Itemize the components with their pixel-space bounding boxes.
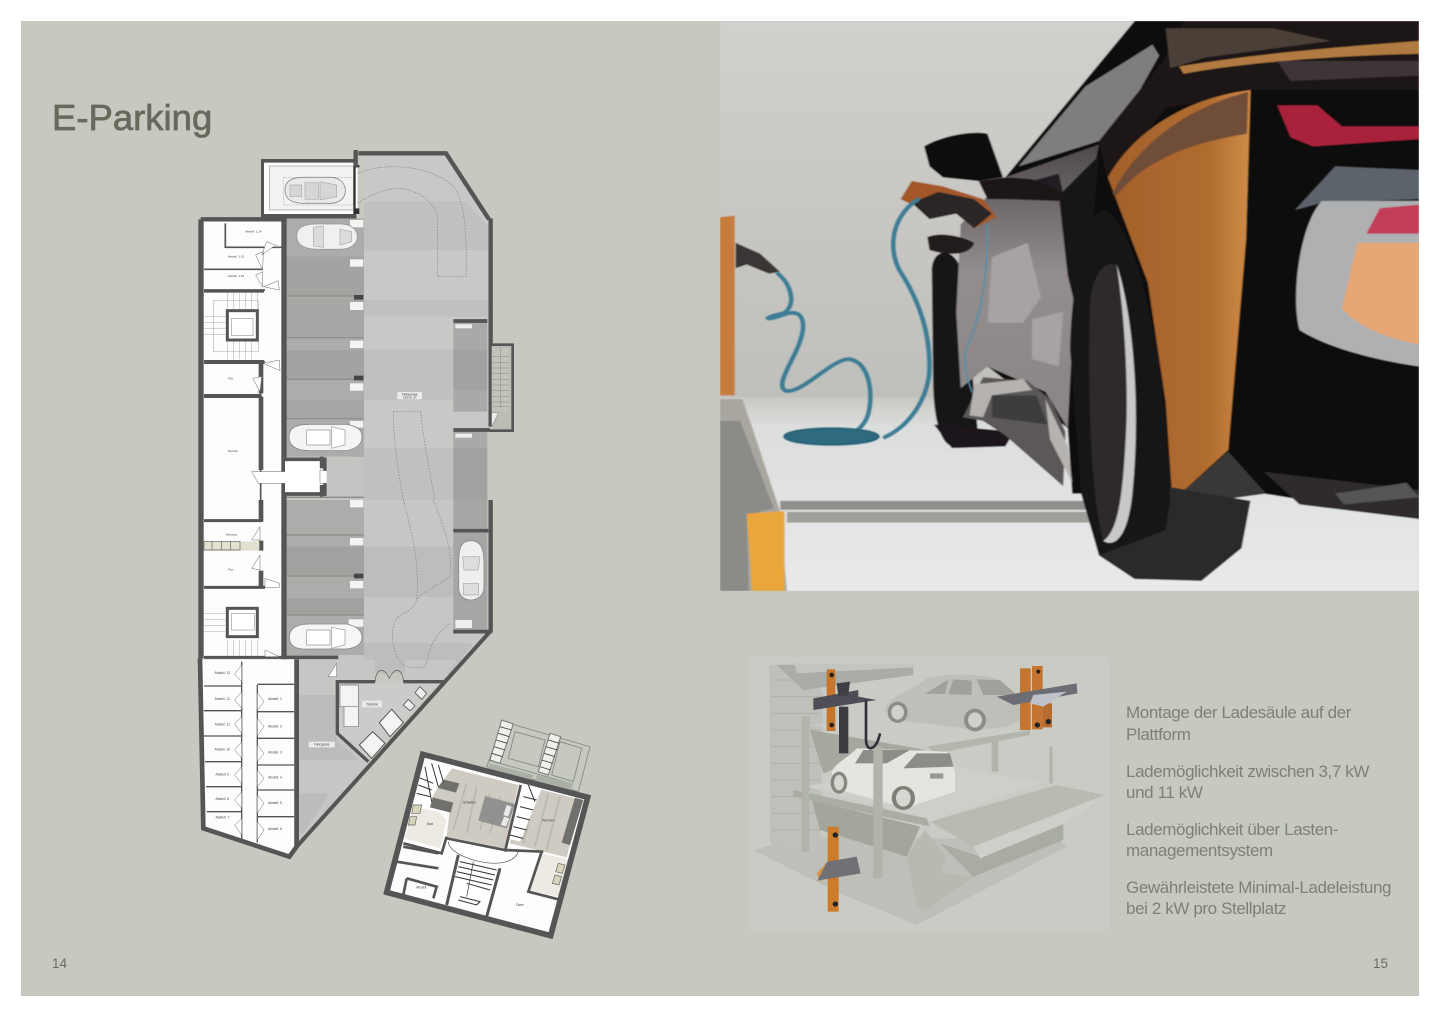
- black body underlay: [961, 21, 1419, 519]
- diagram backdrop: [747, 657, 1110, 930]
- parked car: [289, 624, 362, 649]
- hinged ramp: [930, 785, 1105, 847]
- side body: [956, 145, 1099, 428]
- rear black body: [1237, 90, 1419, 519]
- parking bays left: [287, 219, 364, 457]
- charging cables: [768, 199, 987, 445]
- feature list: [1126, 703, 1391, 918]
- storage rooms block: [199, 659, 294, 858]
- interior walls: [397, 779, 543, 898]
- floor: [720, 397, 1419, 591]
- central stair: [447, 855, 500, 917]
- ramp dashes: [392, 500, 451, 668]
- external stair: [488, 345, 513, 431]
- room labels: Bad: [427, 822, 433, 826]
- storage labels: Abstell. 11: [215, 722, 230, 726]
- mudflap: [1171, 452, 1266, 504]
- rails: [780, 501, 1090, 510]
- storage strip: [204, 541, 259, 551]
- garage lower part: [199, 500, 492, 858]
- tail light: [1277, 105, 1419, 146]
- room labels: Abstell. 1.15: [228, 254, 245, 258]
- stairs: [417, 763, 542, 842]
- under-deck shadows: [810, 730, 927, 773]
- storage labels: Abstell. 12: [215, 697, 230, 701]
- orange fin: [1108, 90, 1250, 501]
- technical room: [337, 682, 443, 762]
- room labels: Diele: [516, 903, 524, 907]
- rear lamp surround: [1296, 201, 1419, 366]
- garage label: 520,00 m²: [403, 396, 416, 400]
- charging post bottom: [817, 827, 861, 912]
- lower stairwell: [204, 608, 257, 656]
- wheel arch and rim: [1070, 210, 1170, 555]
- storage labels: Abstell. 9: [215, 772, 229, 776]
- lower deck: [807, 767, 1040, 822]
- orange charger column: [720, 215, 735, 395]
- bathrooms: [405, 807, 447, 848]
- storage labels: Abstell. 2: [268, 724, 282, 728]
- lower car: [831, 748, 955, 810]
- door swings: [252, 242, 292, 483]
- item: mounting: Plattform: [1126, 725, 1191, 744]
- room labels: Flur: [228, 377, 233, 381]
- storage labels: Abstell. 13: [215, 671, 230, 675]
- diagram: two-level parking platform with charging posts: [747, 657, 1110, 930]
- rear reflection: [1295, 166, 1419, 210]
- garage label: Tiefgarage: [402, 393, 418, 397]
- charging post top right: [997, 666, 1077, 730]
- page number right: 15: [1373, 956, 1388, 971]
- support columns: [802, 717, 1053, 878]
- parked car: [289, 424, 362, 451]
- double door: [328, 663, 403, 682]
- lower concrete: [297, 500, 489, 682]
- base plate: [753, 837, 1067, 925]
- apartment shell: [385, 752, 589, 938]
- far wheel: [932, 253, 979, 446]
- lift room: [261, 159, 359, 219]
- core room: [285, 457, 333, 497]
- charging plug: [901, 181, 996, 228]
- entrance arc: [448, 842, 518, 863]
- room labels: [226, 533, 237, 572]
- room labels: Technik: [228, 449, 238, 453]
- item: mounting: Montage der Ladesäule auf der: [1126, 703, 1352, 722]
- left wall: [769, 663, 823, 853]
- photo: electric car charging on a parking platform: [720, 21, 1419, 591]
- storage labels: Abstell. 7: [215, 815, 229, 819]
- storage labels: Abstell. 4: [268, 775, 282, 779]
- storage labels: Abstell. 8: [215, 797, 229, 801]
- stairwell: [204, 293, 258, 359]
- page number left: 14: [52, 956, 68, 971]
- parked car: [459, 541, 484, 600]
- room labels: Flur: [228, 568, 233, 572]
- driving lane concrete: [364, 153, 489, 500]
- upper car: [885, 675, 1027, 731]
- right bays: [453, 500, 487, 630]
- charger plug: [736, 243, 780, 274]
- storage labels: Abstell. 10: [215, 748, 230, 752]
- storage labels: [215, 671, 282, 831]
- bed: [478, 796, 515, 828]
- storage labels: Abstell. 3: [268, 750, 282, 754]
- item: charging range: Lademöglichkeit zwischen 3,7 kW: [1126, 762, 1369, 781]
- floor plan: rotated upper-floor apartment: [385, 720, 590, 938]
- garage lower part: Fahrgasse: [314, 743, 330, 747]
- body top shoulder: [1099, 21, 1419, 181]
- room labels: Schlafen: [463, 800, 476, 804]
- bay labels: [350, 220, 363, 428]
- pit: [907, 830, 973, 910]
- item: load management: Lademöglichkeit über Lasten-: [1126, 820, 1338, 839]
- room labels: Abstell. 1.14: [245, 230, 262, 234]
- terrace: [487, 720, 590, 792]
- item: minimum power: bei 2 kW pro Stellplatz: [1126, 899, 1286, 918]
- doors: [252, 527, 279, 657]
- garage label: [397, 392, 422, 400]
- parked car: [297, 224, 357, 249]
- outer wall: [387, 754, 588, 936]
- orange corner post: [747, 511, 785, 591]
- wardrobes: [430, 778, 583, 845]
- ramp dashed track: [357, 167, 466, 277]
- room labels: Wohnen: [542, 819, 555, 823]
- room labels: Abstell.: [416, 885, 427, 889]
- title: E-Parking: [52, 97, 212, 138]
- lower bays: [287, 500, 364, 655]
- technical room: Technik: [366, 702, 378, 706]
- room labels: Abstell. 1.16: [228, 274, 245, 278]
- upper deck: [810, 718, 1030, 753]
- mirror: [924, 133, 1003, 181]
- item: charging range: und 11 kW: [1126, 783, 1203, 802]
- ramp triangle: [299, 662, 368, 842]
- platform edge: [720, 399, 787, 591]
- charging post top left: [813, 669, 880, 753]
- garage upper part: [199, 150, 513, 500]
- storage labels: Abstell. 1: [268, 697, 282, 701]
- tyre: [1081, 472, 1250, 581]
- item: load management: managementsystem: [1126, 841, 1273, 860]
- storage labels: Abstell. 5: [268, 801, 282, 805]
- item: minimum power: Gewährleistete Minimal-Ladeleistung: [1126, 878, 1391, 897]
- room labels: Heizung: [226, 533, 237, 537]
- room labels: [416, 800, 555, 907]
- storage labels: Abstell. 6: [268, 827, 282, 831]
- sloped garage wall: [297, 632, 490, 847]
- left service wing: [199, 220, 284, 500]
- right bays: [453, 322, 487, 500]
- striped living rooms: [430, 765, 518, 848]
- room labels: [228, 230, 262, 453]
- floor plan: underground garage: [199, 150, 513, 858]
- wall: [720, 21, 1419, 399]
- side window: [1019, 45, 1159, 166]
- left wing lower: [199, 500, 284, 658]
